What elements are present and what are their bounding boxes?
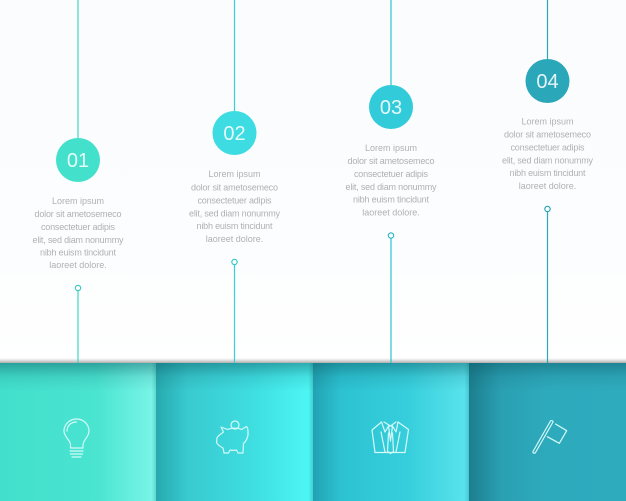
text block: nibh euism tincidunt bbox=[40, 248, 116, 258]
marker ring bbox=[545, 206, 550, 212]
text block: dolor sit ametosemeco bbox=[34, 209, 122, 219]
icon: flag bbox=[533, 421, 567, 453]
number circle: 03 bbox=[380, 97, 402, 119]
line bbox=[390, 0, 392, 363]
text block: consectetuer adipis bbox=[198, 196, 272, 206]
text block: dolor sit ametosemeco bbox=[504, 130, 591, 140]
text block bbox=[189, 169, 280, 244]
step 4 bbox=[502, 0, 594, 363]
icon: piggy bank bbox=[216, 421, 248, 453]
line bbox=[546, 0, 548, 363]
text block: nibh euism tincidunt bbox=[353, 194, 429, 204]
marker ring bbox=[232, 259, 237, 265]
text block: elit, sed diam nonummy bbox=[189, 208, 280, 218]
text block: consectetuer adipis bbox=[510, 142, 585, 152]
panel 4 bbox=[469, 363, 626, 501]
text block bbox=[346, 143, 437, 218]
text block: dolor sit ametosemeco bbox=[348, 156, 434, 166]
panel 1 bbox=[0, 363, 156, 501]
text block: nibh euism tincidunt bbox=[510, 168, 586, 178]
panel 3 bbox=[313, 363, 469, 501]
text block: elit, sed diam nonummy bbox=[502, 156, 594, 166]
text block: Lorem ipsum bbox=[521, 116, 574, 126]
number circle bbox=[526, 59, 570, 103]
text block: consectetuer adipis bbox=[354, 169, 428, 179]
text block: Lorem ipsum bbox=[365, 143, 417, 153]
icon: suit bbox=[372, 422, 408, 454]
number circle bbox=[369, 85, 413, 129]
number circle: 01 bbox=[67, 150, 89, 172]
icon: light bulb bbox=[64, 419, 89, 457]
step 2 bbox=[189, 0, 280, 363]
step 1 bbox=[32, 0, 124, 363]
number circle: 02 bbox=[223, 123, 246, 145]
step 3 bbox=[346, 0, 437, 363]
text block: elit, sed diam nonummy bbox=[32, 235, 124, 245]
marker ring bbox=[388, 233, 394, 238]
text block: consectetuer adipis bbox=[41, 222, 116, 232]
text block: laoreet dolore. bbox=[362, 208, 420, 218]
number circle: 04 bbox=[536, 71, 559, 93]
marker ring bbox=[75, 285, 81, 291]
text block: Lorem ipsum bbox=[208, 169, 261, 179]
number circle bbox=[212, 111, 256, 155]
number circle bbox=[56, 138, 100, 182]
text block: dolor sit ametosemeco bbox=[191, 182, 278, 192]
line bbox=[234, 0, 236, 363]
text block: laoreet dolore. bbox=[206, 234, 263, 244]
text block: nibh euism tincidunt bbox=[196, 221, 273, 231]
panel top shadow bbox=[0, 363, 626, 391]
shadow edge bbox=[0, 358, 626, 363]
line bbox=[77, 0, 79, 363]
text block: elit, sed diam nonummy bbox=[346, 182, 437, 192]
background bbox=[0, 0, 626, 363]
text block bbox=[502, 116, 594, 191]
text block: laoreet dolore. bbox=[49, 260, 107, 270]
text block: laoreet dolore. bbox=[519, 181, 576, 191]
panel 2 bbox=[156, 363, 313, 501]
text block: Lorem ipsum bbox=[52, 196, 104, 206]
panel: color blocks bbox=[0, 363, 626, 501]
text block bbox=[32, 196, 124, 270]
